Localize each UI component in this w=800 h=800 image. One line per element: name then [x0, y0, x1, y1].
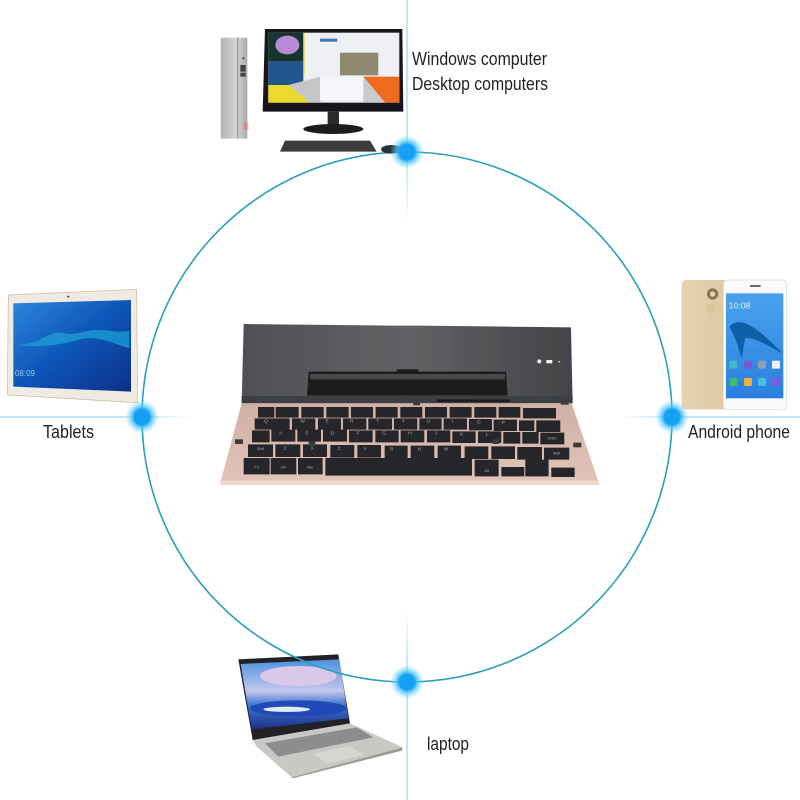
keyboard: [280, 141, 377, 152]
key legends: J: [435, 431, 438, 437]
key legends: Shift: [257, 447, 264, 451]
key legends: P: [502, 420, 506, 426]
laptop: [238, 654, 403, 778]
key legends: Ctrl: [280, 466, 286, 470]
tablet: 08:09: [15, 369, 36, 378]
key legends: R: [350, 419, 354, 425]
key legends: A: [279, 431, 283, 437]
node: right: [655, 400, 689, 434]
desktop computer: [221, 29, 403, 154]
key legends: D: [331, 431, 335, 437]
foldable keyboard: [220, 324, 599, 485]
key legends: X: [311, 445, 315, 451]
key legends: E: [326, 419, 330, 425]
node: top: [390, 135, 424, 169]
key legends: [255, 419, 560, 473]
mouse: [381, 145, 401, 154]
label: desktop computers: Desktop computers: [412, 74, 548, 94]
key legends: Q: [264, 419, 268, 425]
key legends: G: [382, 431, 386, 437]
key legends: T: [376, 419, 379, 425]
key legends: S: [305, 431, 309, 437]
key legends: W: [300, 419, 305, 425]
phone back: [682, 280, 727, 409]
key legends: U: [427, 419, 431, 425]
node: bottom: [390, 665, 424, 699]
label: windows computer: Windows computer: [412, 49, 547, 69]
key legends: M: [444, 447, 448, 453]
key legends: Alt: [484, 469, 489, 473]
phone front: 10:08: [729, 301, 751, 311]
key legends: Shift: [553, 452, 560, 456]
android phone: [682, 280, 787, 409]
tower: [221, 38, 248, 139]
key legends: B: [390, 447, 394, 453]
node: left: [125, 400, 159, 434]
key legends: V: [363, 446, 367, 452]
label: laptop: laptop: [427, 734, 469, 754]
key legends: Enter: [548, 436, 557, 440]
label: tablets: Tablets: [43, 422, 94, 442]
key legends: Y: [402, 419, 406, 425]
key legends: I: [452, 419, 453, 425]
key legends: O: [477, 419, 481, 425]
hinges: [235, 397, 581, 447]
key legends: N: [418, 447, 422, 453]
ring: [142, 152, 672, 682]
keys: [244, 407, 574, 477]
keyboard stand panel: [242, 324, 573, 403]
keyboard base: [220, 403, 599, 484]
key legends: H: [408, 431, 412, 437]
key legends: K: [460, 431, 464, 437]
key legends: Z: [283, 445, 287, 451]
key legends: Fn: [255, 466, 259, 470]
monitor: [263, 29, 403, 134]
tablet: [7, 289, 138, 403]
key legends: Win: [307, 466, 313, 470]
key legends: F: [357, 431, 360, 437]
key legends: C: [338, 446, 342, 452]
key legends: L: [486, 431, 489, 437]
